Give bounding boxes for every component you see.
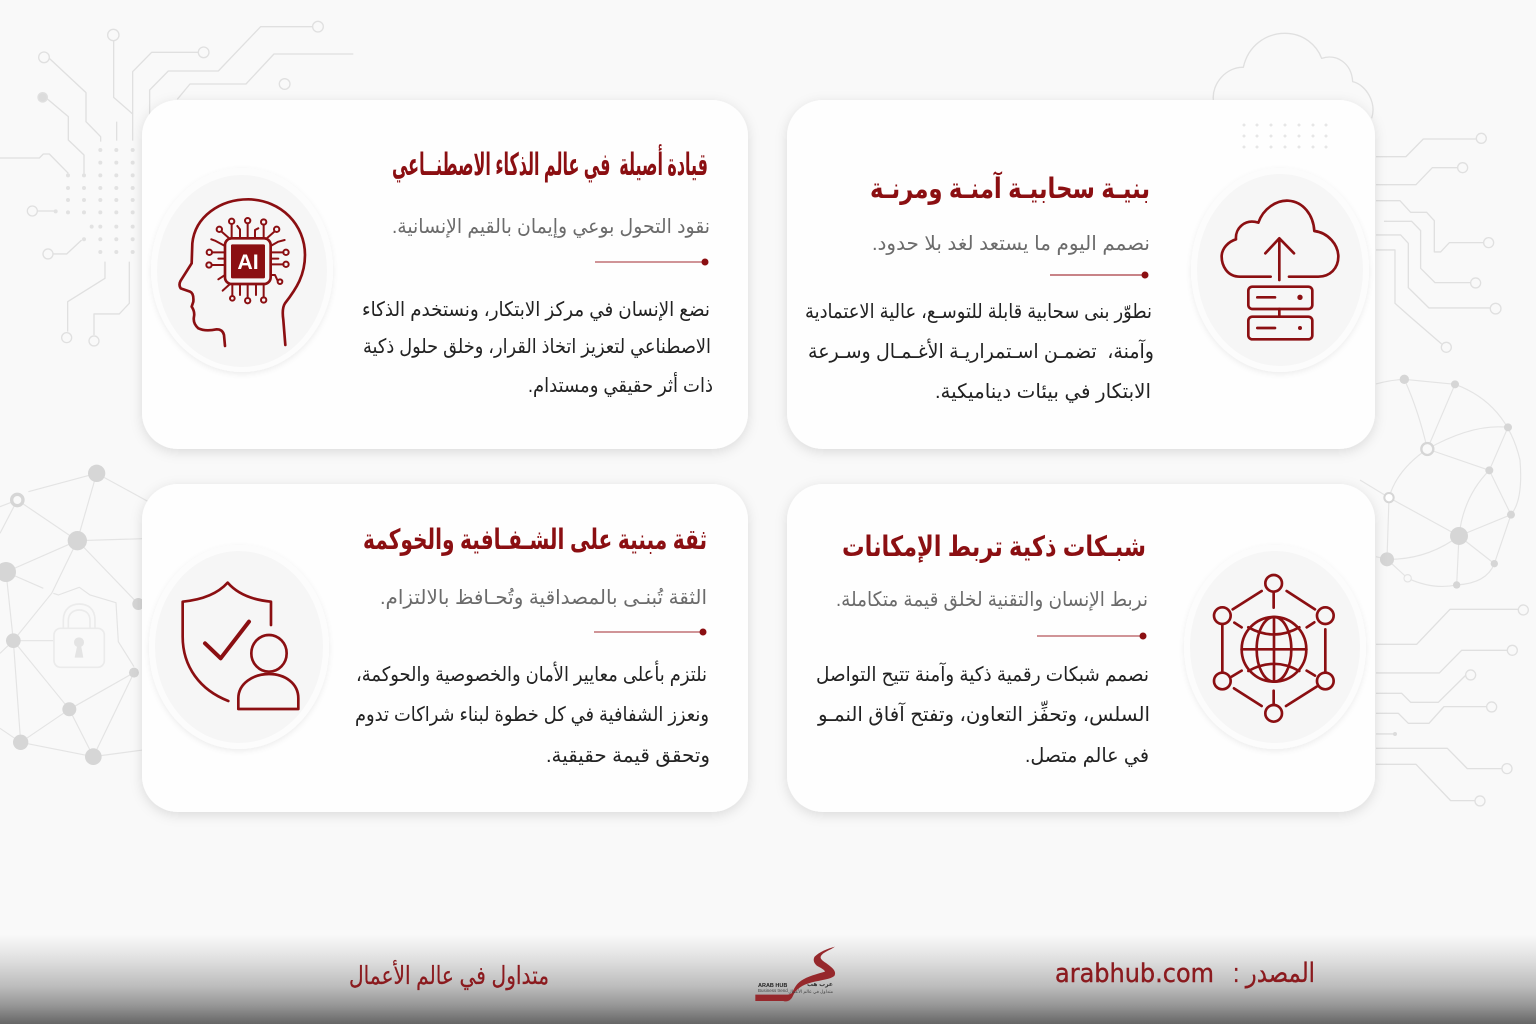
icon badge: AI head: AI <box>237 250 259 274</box>
card background <box>142 100 748 449</box>
footer tagline: متداول في عالم الأعمال <box>349 959 549 991</box>
logo: متداول في عالم الأعمال <box>788 988 834 995</box>
logo <box>755 947 835 1001</box>
divider with dot <box>594 628 706 636</box>
logo: ARAB HUB <box>758 983 787 989</box>
source label: المصدر : <box>1233 958 1315 989</box>
source url: arabhub.com <box>1055 959 1214 989</box>
body text <box>362 299 713 398</box>
icon badge: shield and person <box>149 545 329 749</box>
body text: الابتكار في بيئات ديناميكية. <box>935 381 1151 404</box>
subheading: الثقة تُبنـى بالمصداقية وتُحـافظ بالالتزام. <box>380 587 707 609</box>
panel: trust built on transparency <box>142 484 748 812</box>
icon badge: cloud and server <box>1191 168 1369 372</box>
divider with dot <box>595 258 708 266</box>
body text: ونعزز الشفافية في كل خطوة لبناء شراكات تدوم <box>355 704 709 727</box>
background: cloud and circuit top right <box>1213 33 1501 352</box>
background: network and circuit right <box>1360 375 1528 806</box>
heading: ثقة مبنية على الشـفـافية والخوكمة <box>363 524 707 556</box>
icon badge: globe network <box>1184 545 1366 749</box>
body text: وآمنة، تضمـن اسـتمراريـة الأغـمـال وسـرعة <box>808 338 1154 363</box>
card dot grid <box>1242 124 1328 148</box>
body text: السلس، وتحفِّز التعاون، وتفتح آفاق النمـو <box>817 700 1150 726</box>
body text: نلتزم بأعلى معايير الأمان والخصوصية والحوكمة، <box>356 660 707 686</box>
panel: secure cloud infrastructure <box>787 100 1375 449</box>
divider with dot <box>1037 632 1146 640</box>
card background <box>787 484 1375 812</box>
logo: Business trend <box>758 988 788 993</box>
body text: نصمم شبكات رقمية ذكية وآمنة تتيح التواصل <box>816 661 1149 686</box>
card background <box>787 100 1375 449</box>
panel: authentic AI leadership <box>142 100 748 449</box>
panel: smart networks <box>787 484 1375 812</box>
heading: بنيـة سحابيـة آمنـة ومرنـة <box>870 171 1150 205</box>
subheading: نصمم اليوم ما يستعد لغد بلا حدود. <box>872 233 1150 255</box>
body text: نضع الإنسان في مركز الابتكار، ونستخدم الذكاء <box>362 299 710 322</box>
background: circuit top left <box>0 21 353 346</box>
divider with dot <box>1050 272 1148 278</box>
body text: الاصطناعي لتعزيز اتخاذ القرار، وخلق حلول ذكية <box>363 336 711 359</box>
heading: قيادة أصيلة في عالم الذكاء الاصطنــاعي <box>392 144 708 183</box>
background: network and padlock left <box>0 465 148 765</box>
body text <box>355 660 710 767</box>
logo: عرب هب <box>807 982 833 988</box>
body text: ذات أثر حقيقي ومستدام. <box>528 372 713 398</box>
body text: نطوّر بنى سحابية قابلة للتوسـع، عالية الاعتمادية <box>805 301 1152 323</box>
subheading: نربط الإنسان والتقنية لخلق قيمة متكاملة. <box>836 589 1148 611</box>
icon badge: AI head <box>151 168 333 372</box>
heading: شبـكات ذكية تربط الإمكانات <box>842 531 1146 563</box>
body text <box>816 661 1150 768</box>
footer band <box>0 935 1536 1024</box>
body text: في عالم متصل. <box>1025 745 1149 768</box>
card background <box>142 484 748 812</box>
body text <box>805 301 1154 404</box>
subheading: نقود التحول بوعي وإيمان بالقيم الإنسانية. <box>392 216 710 239</box>
body text: وتحقق قيمة حقيقية. <box>546 745 710 767</box>
